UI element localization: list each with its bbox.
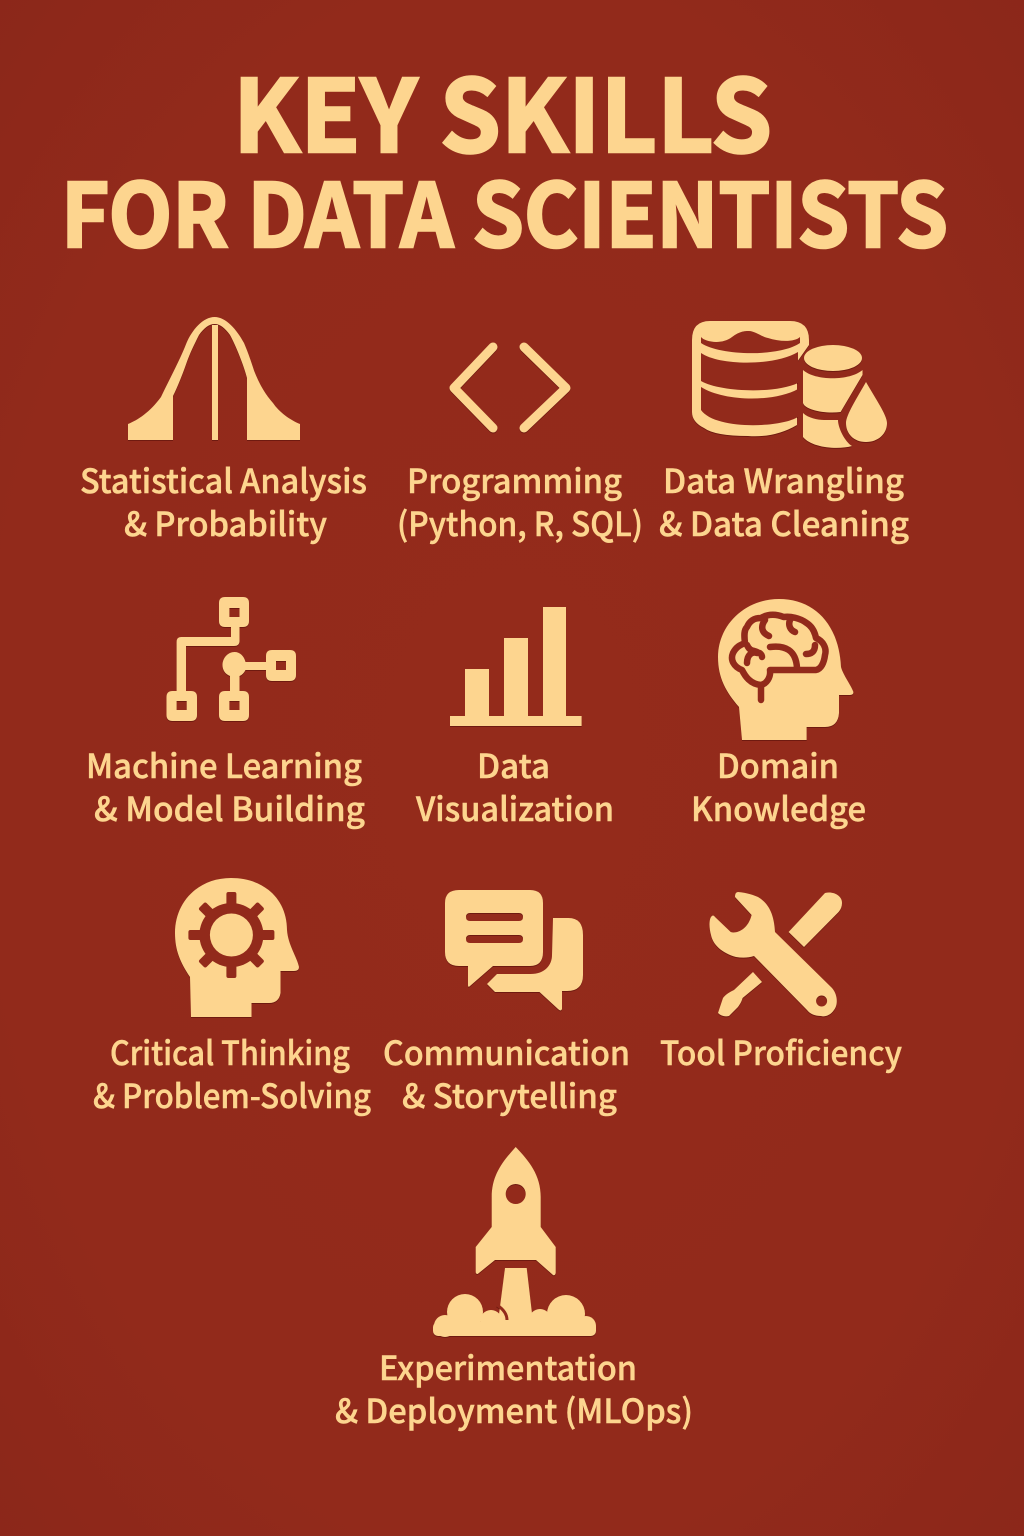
icon: model graph (166, 597, 296, 721)
skill: tool proficiency (660, 892, 902, 1075)
icon: chat bubbles (445, 890, 583, 1010)
skill: data wrangling (659, 321, 909, 546)
label (80, 455, 367, 546)
icon: head with gear (175, 878, 299, 1017)
label (93, 1027, 371, 1118)
label: & Model Building (94, 783, 365, 831)
skill: machine learning (86, 597, 365, 831)
icon: wrench and screwdriver (710, 892, 842, 1016)
title: FOR DATA SCIENTISTS (61, 146, 948, 273)
label: Data (477, 740, 550, 788)
label: Knowledge (691, 783, 866, 831)
label: Tool Proficiency (660, 1027, 902, 1075)
label: Machine Learning (86, 740, 362, 788)
label: Statistical Analysis (80, 455, 367, 503)
label (659, 455, 909, 546)
label (383, 1027, 630, 1118)
label: (Python, R, SQL) (397, 498, 643, 546)
icon: bell curve (128, 317, 300, 440)
skill: experimentation and deployment (335, 1147, 693, 1433)
title: KEY SKILLS (233, 36, 772, 181)
label: Programming (407, 455, 622, 503)
label (335, 1342, 693, 1433)
label (397, 455, 643, 546)
label: Domain (717, 740, 839, 788)
skill: communication (383, 890, 630, 1118)
skill: programming (397, 347, 643, 546)
label: Data Wrangling (663, 455, 904, 503)
label: & Storytelling (402, 1070, 617, 1118)
icon: code brackets (454, 347, 566, 428)
icon: bar chart (450, 607, 582, 726)
icon: rocket launch (433, 1147, 596, 1337)
label (691, 740, 866, 831)
label: & Problem-Solving (93, 1070, 371, 1118)
label: & Data Cleaning (659, 498, 909, 546)
icon: database and drop (692, 321, 887, 448)
label: Communication (383, 1027, 630, 1075)
label: & Probability (124, 498, 327, 546)
label: Critical Thinking (110, 1027, 350, 1075)
label: Visualization (415, 783, 614, 831)
icon: head with brain (718, 599, 853, 740)
title (61, 36, 948, 273)
label: & Deployment (MLOps) (335, 1385, 693, 1433)
label (415, 740, 614, 831)
skill: domain knowledge (691, 599, 866, 831)
label: Experimentation (379, 1342, 637, 1390)
skill: statistical analysis (80, 317, 367, 546)
skill: data visualization (415, 607, 614, 831)
skill: critical thinking (93, 878, 371, 1118)
label (86, 740, 365, 831)
